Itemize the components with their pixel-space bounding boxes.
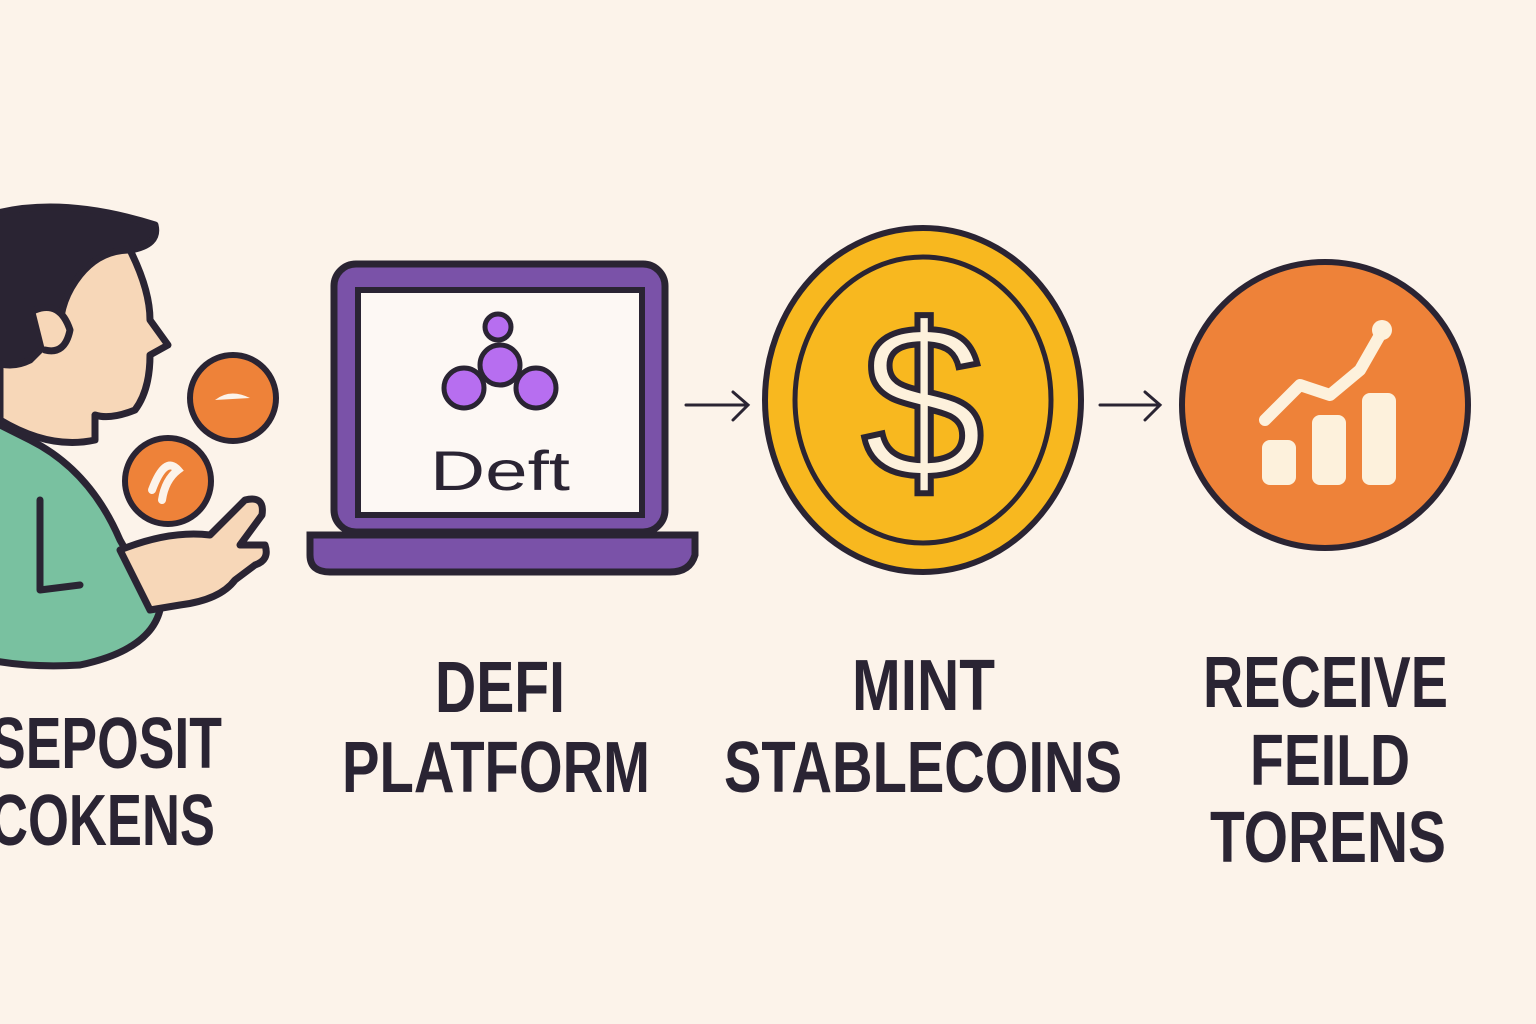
icon: person holding coins bbox=[0, 207, 266, 666]
icon: laptop bbox=[310, 264, 695, 572]
label: receive yield tokens: TORENS bbox=[1210, 798, 1446, 878]
label: defi platform: DEFI bbox=[435, 648, 565, 728]
icon: yield chart circle bbox=[1182, 262, 1468, 548]
label: deposit tokens bbox=[0, 704, 222, 861]
label: receive yield tokens: RECEIVE bbox=[1203, 643, 1448, 723]
label: receive yield tokens bbox=[1203, 643, 1448, 878]
arrow 1 bbox=[686, 392, 748, 420]
icon: dollar coin: $ bbox=[862, 279, 984, 525]
icon: laptop: Deft bbox=[430, 439, 571, 502]
arrow 2 bbox=[1100, 392, 1160, 420]
label: mint stablecoins: MINT bbox=[852, 646, 995, 726]
icon: dollar coin bbox=[765, 228, 1081, 572]
label: receive yield tokens: FEILD bbox=[1250, 721, 1410, 801]
icon: orange coin top bbox=[190, 355, 276, 441]
label: defi platform: PLATFORM bbox=[342, 728, 650, 808]
icon: orange coin bottom bbox=[125, 438, 211, 524]
label: mint stablecoins bbox=[724, 646, 1122, 808]
label: mint stablecoins: STABLECOINS bbox=[724, 728, 1122, 808]
label: defi platform bbox=[342, 648, 650, 808]
